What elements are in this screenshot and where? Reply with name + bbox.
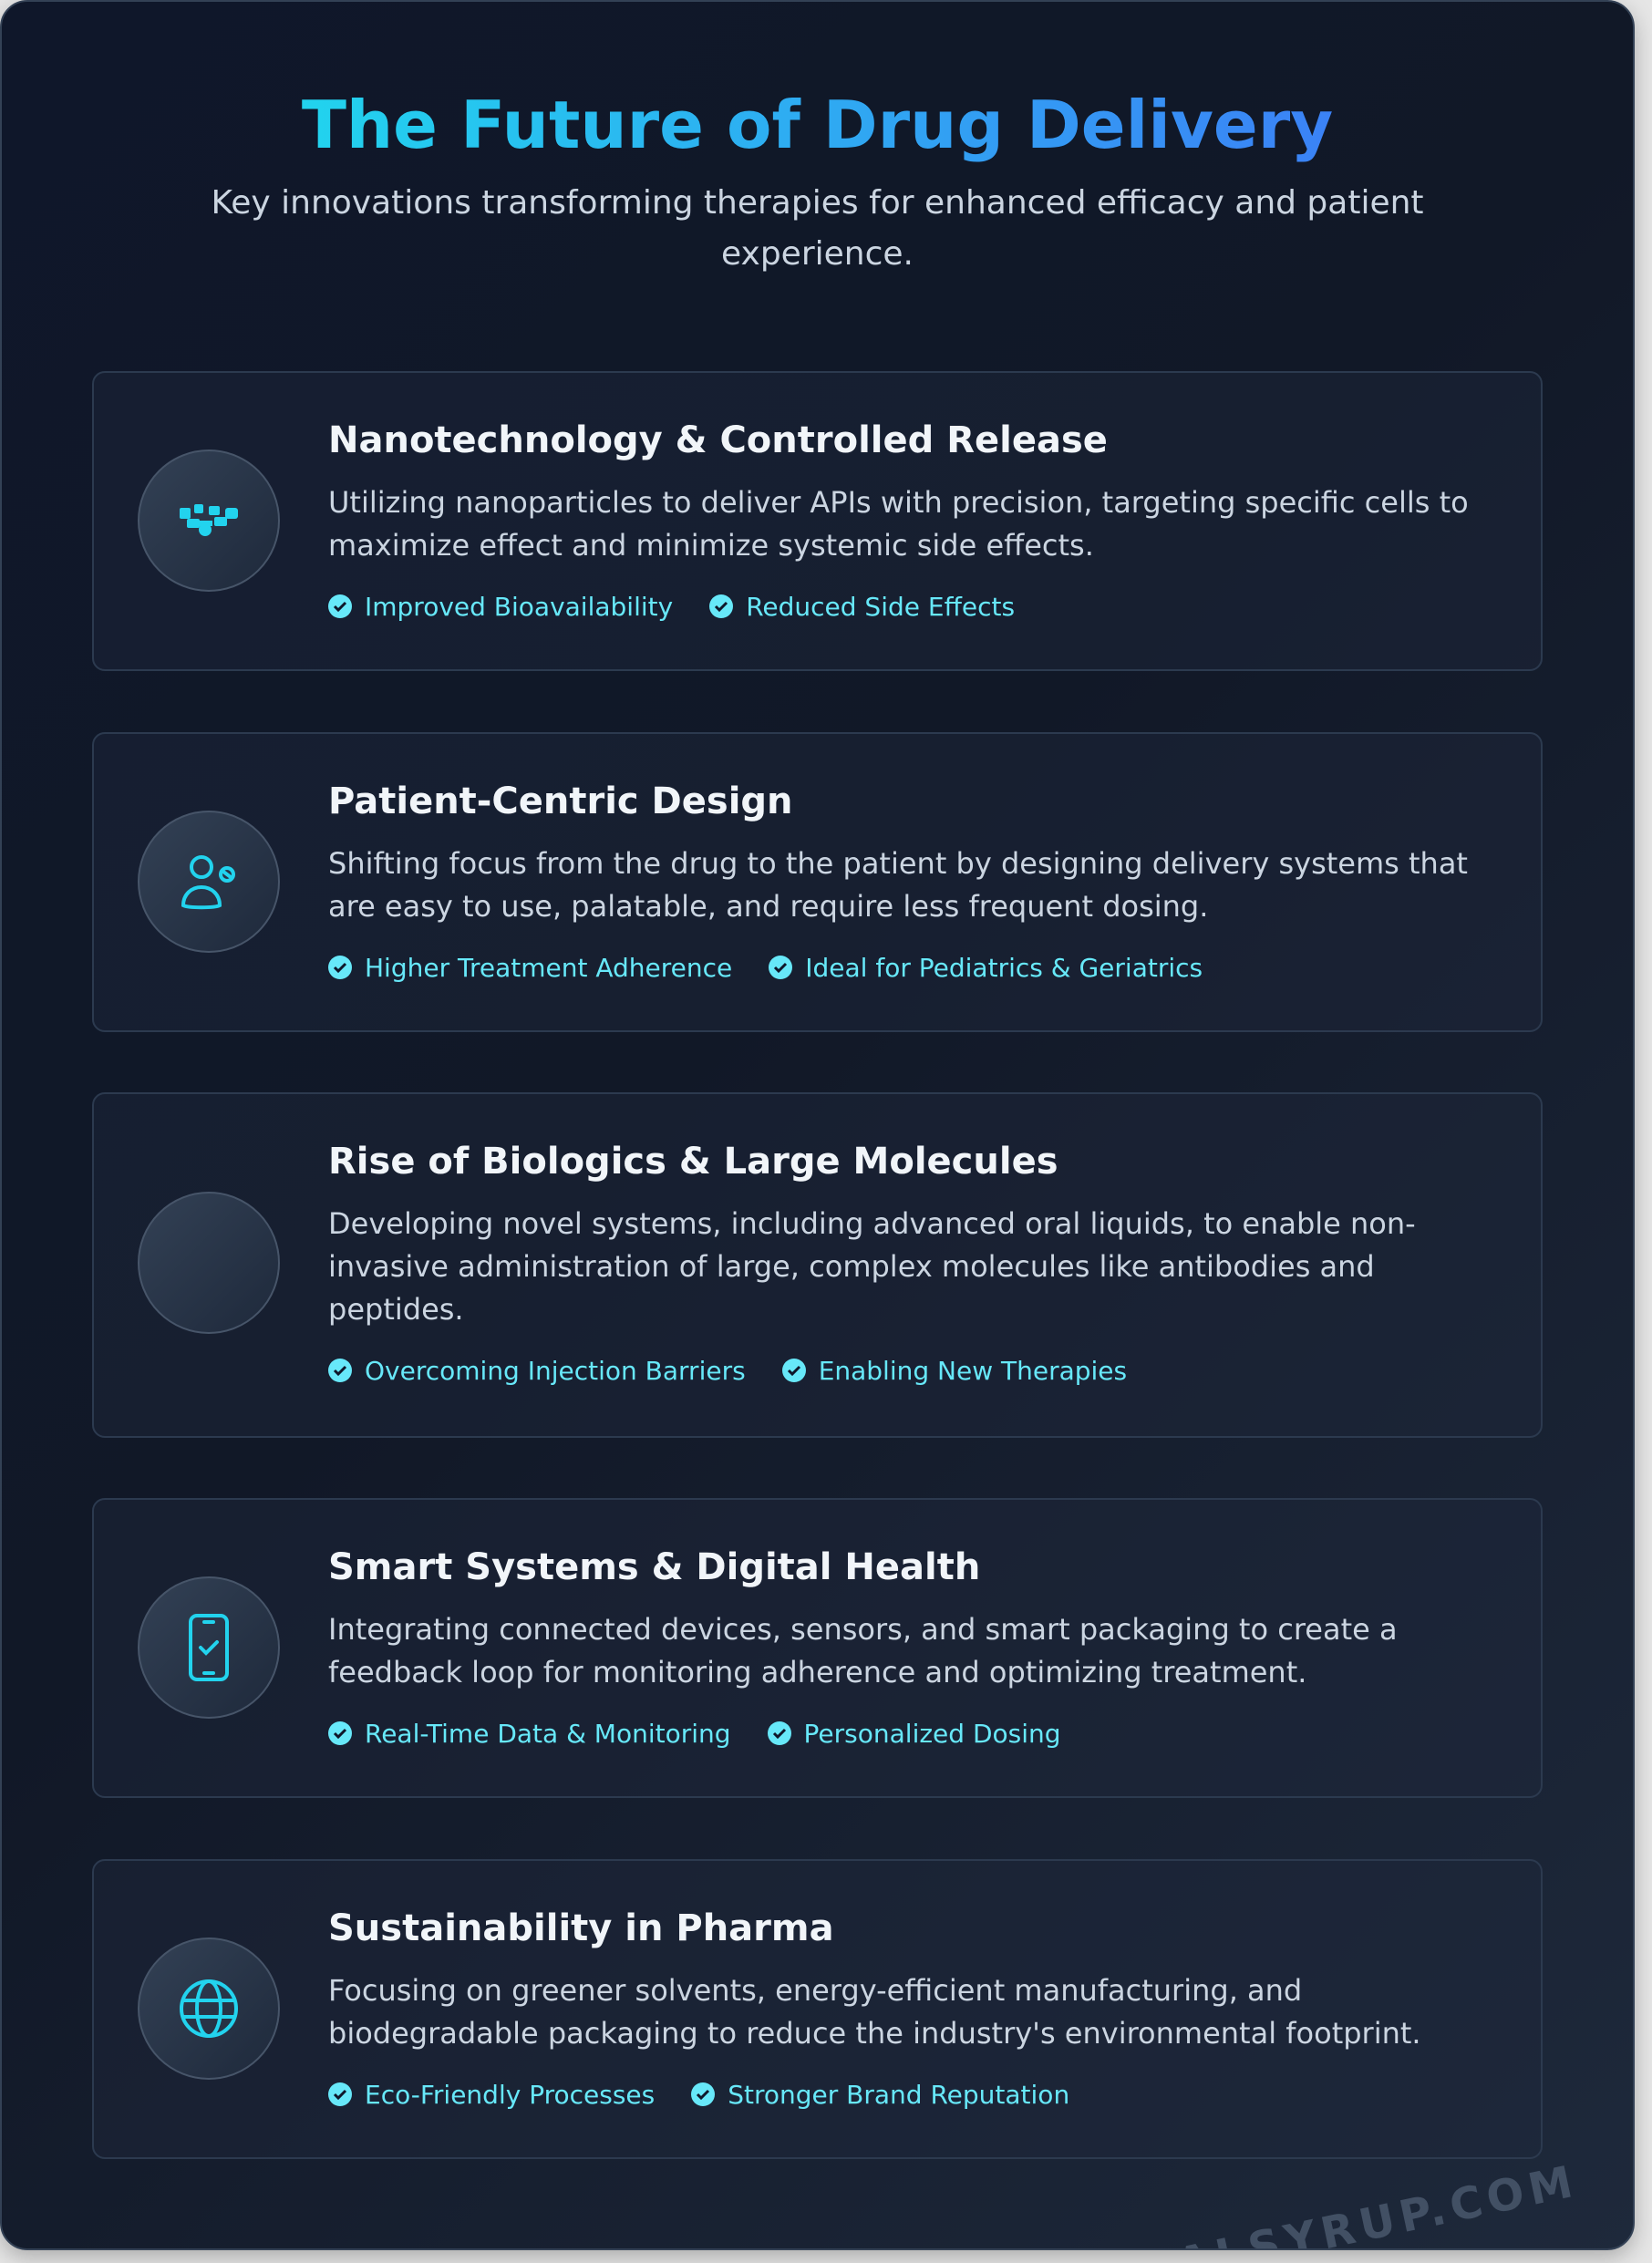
tags: Higher Treatment Adherence xyxy=(365,952,732,983)
icon: user xyxy=(138,811,280,953)
heading: Sustainability in Pharma xyxy=(328,1907,834,1949)
subtitle: Key innovations transforming therapies for enhanced efficacy and patient experience. xyxy=(211,184,1424,273)
panel: biologics xyxy=(92,1092,1543,1438)
body text: Shifting focus from the drug to the patient by designing delivery systems that are easy to use, palatable, and require less frequent dosing. xyxy=(328,846,1468,924)
tags xyxy=(328,1355,1127,1386)
tags: Stronger Brand Reputation xyxy=(728,2079,1069,2110)
tags: Enabling New Therapies xyxy=(819,1355,1127,1386)
tags: Overcoming Injection Barriers xyxy=(365,1355,746,1386)
tags: Ideal for Pediatrics & Geriatrics xyxy=(805,952,1203,983)
tags: Improved Bioavailability xyxy=(365,591,673,622)
tags: Eco-Friendly Processes xyxy=(365,2079,655,2110)
heading: Smart Systems & Digital Health xyxy=(328,1546,980,1588)
panel: smart systems xyxy=(92,1498,1543,1798)
heading: Patient-Centric Design xyxy=(328,780,793,822)
heading: Nanotechnology & Controlled Release xyxy=(328,419,1108,461)
body text: Utilizing nanoparticles to deliver APIs with precision, targeting specific cells to maximize effect and minimize systemic side effects. xyxy=(328,485,1469,563)
body text: Integrating connected devices, sensors, and smart packaging to create a feedback loop for monitoring adherence and optimizing treatment. xyxy=(328,1612,1398,1690)
tags: Real-Time Data & Monitoring xyxy=(365,1718,731,1749)
tags: Personalized Dosing xyxy=(804,1718,1061,1749)
icon: globe xyxy=(138,1938,280,2080)
icon: empty circle xyxy=(138,1192,280,1334)
body text: Developing novel systems, including advanced oral liquids, to enable non-invasive administration of large, complex molecules like antibodies and peptides. xyxy=(328,1206,1416,1327)
icon: nanoparticles xyxy=(138,450,280,592)
panel: nanotechnology xyxy=(92,371,1543,671)
tags: Reduced Side Effects xyxy=(746,591,1015,622)
tags xyxy=(328,952,1203,983)
tags xyxy=(328,1718,1061,1749)
tags xyxy=(328,591,1015,622)
title: The Future of Drug Delivery xyxy=(302,87,1333,163)
heading: Rise of Biologics & Large Molecules xyxy=(328,1141,1058,1183)
tags xyxy=(328,2079,1069,2110)
icon: phone xyxy=(138,1576,280,1719)
panel: sustainability xyxy=(92,1859,1543,2159)
body text: Focusing on greener solvents, energy-efficient manufacturing, and biodegradable packaging to reduce the industry's environmental footprint. xyxy=(328,1973,1421,2051)
panel: patient-centric xyxy=(92,732,1543,1032)
